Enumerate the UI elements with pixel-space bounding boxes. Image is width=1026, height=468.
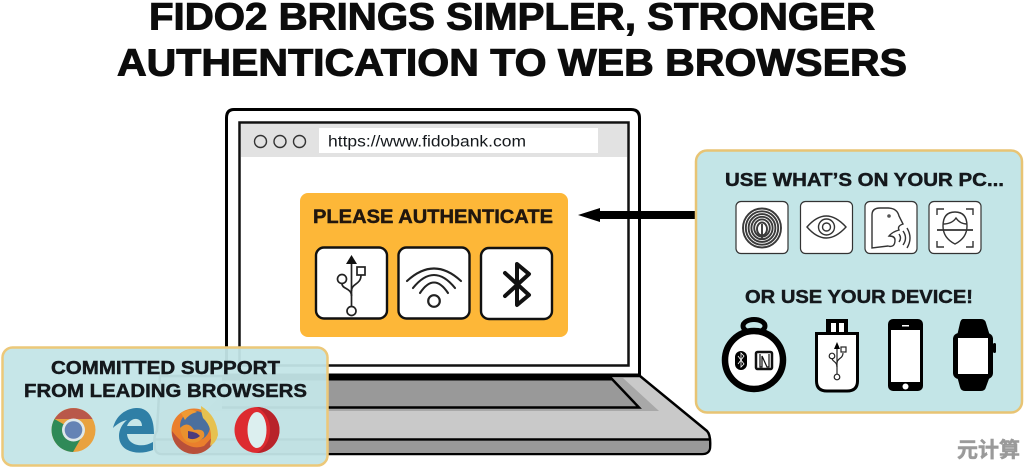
laptop lid — [226, 110, 640, 375]
icon: eye — [800, 202, 852, 254]
heading: pc: USE WHAT’S ON YOUR PC... — [725, 169, 1004, 190]
address bar: https://www.fidobank.com — [328, 134, 526, 150]
window buttons — [254, 136, 306, 148]
icon: fingerprint — [736, 202, 788, 254]
heading: PLEASE AUTHENTICATE — [313, 207, 553, 228]
icon: bluetooth button — [481, 248, 552, 319]
browser window — [240, 122, 628, 366]
support heading: COMMITTED SUPPORT — [51, 357, 281, 378]
panel: please authenticate — [300, 193, 568, 337]
support heading: FROM LEADING BROWSERS — [24, 380, 307, 401]
icon: chrome — [52, 408, 96, 452]
title — [117, 0, 907, 84]
icon: watch — [953, 319, 996, 391]
arrow — [578, 208, 696, 222]
panel: browser support — [2, 348, 328, 466]
laptop base — [154, 376, 710, 454]
title: AUTHENTICATION TO WEB BROWSERS — [117, 42, 907, 84]
panel: use what's on your pc — [696, 150, 1022, 412]
icon: usb key — [816, 319, 858, 391]
icon: usb button — [316, 248, 387, 318]
icon: wifi button — [398, 248, 470, 318]
icon: key fob — [725, 320, 783, 389]
laptop — [154, 110, 710, 454]
icon: edge — [113, 408, 154, 453]
support heading — [24, 357, 307, 401]
icon: voice — [865, 202, 917, 254]
icon: phone — [888, 319, 923, 391]
watermark: 元计算 — [957, 439, 1020, 462]
browser toolbar — [241, 124, 627, 157]
icon: face scan — [929, 202, 981, 254]
icon: firefox — [172, 406, 218, 454]
address bar — [319, 128, 598, 153]
icon: opera — [234, 407, 280, 453]
heading: device: OR USE YOUR DEVICE! — [745, 286, 973, 307]
